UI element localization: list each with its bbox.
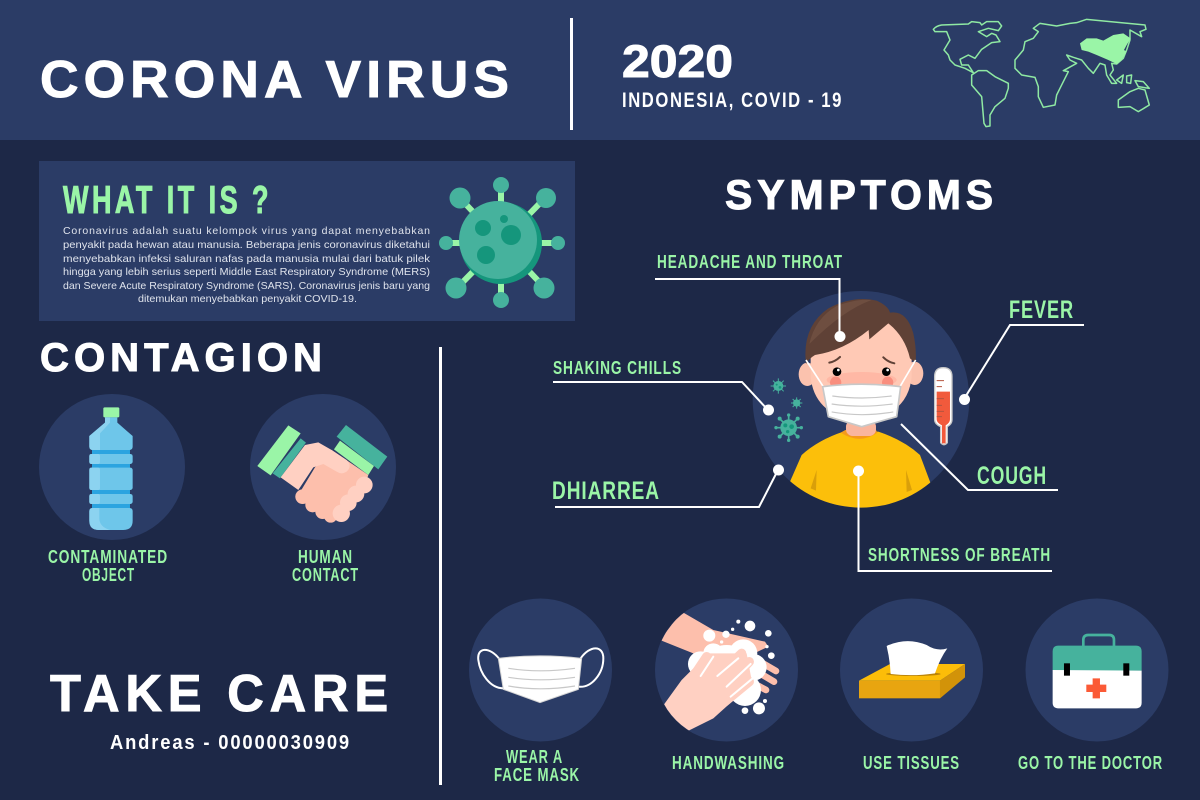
callout: shaking chills: [553, 358, 774, 416]
icon: washing hands: [660, 612, 776, 732]
ears: [799, 363, 816, 386]
label: [494, 747, 580, 785]
prevention: handwashing: [655, 598, 798, 773]
divider line: [439, 347, 442, 785]
label: CONTAMINATED: [48, 547, 168, 567]
label: [48, 547, 168, 585]
panel: what it is: [39, 161, 575, 321]
callout: headache and throat: HEADACHE AND THROAT: [657, 252, 843, 272]
eyes: [833, 367, 841, 376]
thermometer: [935, 368, 952, 445]
face mask: [823, 384, 901, 427]
icon: tissue box: [859, 641, 965, 698]
description text: ditemukan menyebabkan penyakit COVID-19.: [138, 293, 357, 305]
subtitle: INDONESIA, COVID - 19: [622, 89, 843, 112]
title: CORONA VIRUS: [40, 51, 514, 109]
description text: Coronavirus adalah suatu kelompok virus yang dapat menyebabkan: [63, 225, 430, 237]
label: [292, 547, 359, 585]
author line: Andreas - 00000030909: [110, 732, 351, 754]
icon: water bottle: [89, 407, 133, 530]
icon: first aid kit: [1053, 635, 1142, 708]
callout: cough: COUGH: [977, 462, 1047, 490]
prevention: wear a face mask: [469, 598, 612, 785]
label: OBJECT: [82, 565, 135, 585]
callout: dhiarrea: [552, 464, 784, 507]
closing heading: take care: TAKE CARE: [50, 665, 394, 723]
label: FACE MASK: [494, 765, 580, 785]
prevention: go to the doctor: [1018, 598, 1168, 773]
callout: fever: FEVER: [1009, 296, 1074, 324]
callout: headache and throat: [655, 252, 846, 342]
label: WEAR A: [506, 747, 563, 767]
callout: shortness of breath: [853, 466, 1052, 571]
mask straps: [806, 360, 916, 387]
contagion item: contaminated object: [39, 394, 185, 585]
description text: [63, 225, 431, 305]
viruses: [771, 378, 803, 442]
header band: [0, 0, 1200, 140]
label: HANDWASHING: [672, 753, 785, 773]
callout: fever: [959, 296, 1084, 405]
callout: shortness of breath: SHORTNESS OF BREATH: [868, 545, 1051, 565]
face: [811, 310, 912, 423]
year: 2020: [622, 36, 733, 87]
contagion item: human contact: [250, 394, 396, 585]
brows: [829, 357, 894, 363]
prevention: use tissues: [840, 598, 983, 773]
heading: symptoms: SYMPTOMS: [725, 171, 998, 218]
label: USE TISSUES: [863, 753, 960, 773]
description text: penyakit pada hewan atau manusia. Beberapa jenis coronavirus diketahui: [63, 239, 430, 251]
icon: world map: [933, 19, 1149, 127]
label: HUMAN: [298, 547, 353, 567]
description text: hingga yang lebih serius seperti Middle East Respiratory Syndrome (MERS): [63, 266, 430, 278]
description text: menyebabkan infeksi saluran nafas pada manusia mulai dari batuk pilek: [63, 253, 431, 265]
heading: contagion: CONTAGION: [40, 336, 327, 380]
callout: dhiarrea: DHIARREA: [552, 477, 660, 505]
icon: virus: [439, 177, 565, 308]
label: CONTACT: [292, 565, 359, 585]
description text: dan Severe Acute Respiratory Syndrome (SARS). Coronavirus jenis baru yang: [63, 280, 430, 292]
icon: handshake: [257, 425, 387, 523]
symptoms illustration: sick person: [753, 291, 969, 513]
callout: shaking chills: SHAKING CHILLS: [553, 358, 682, 378]
icon: surgical mask: [478, 648, 603, 703]
heading: what it is: WHAT IT IS ?: [63, 179, 272, 222]
callout: cough: [901, 424, 1058, 490]
shirt: [790, 432, 931, 513]
hair: [805, 299, 916, 364]
